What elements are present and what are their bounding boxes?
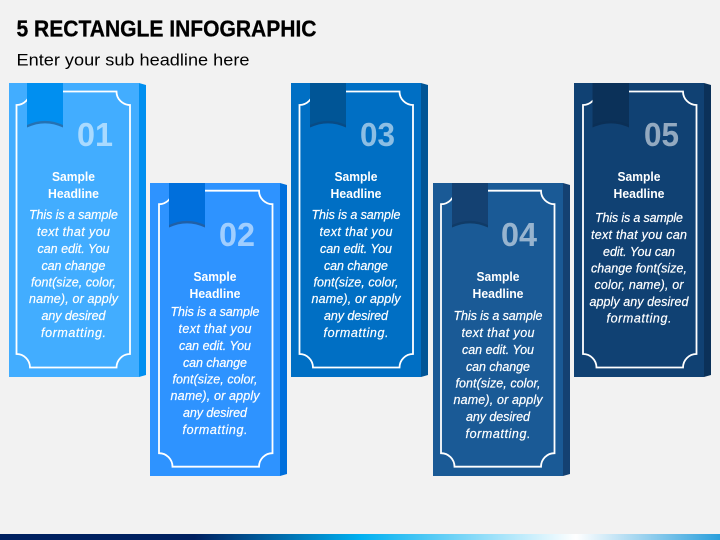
headline 03 <box>330 170 382 201</box>
body text 04: font(size, color, <box>456 376 540 390</box>
body text 01: any desired <box>42 309 107 323</box>
icon: ribbon 02 <box>169 183 205 225</box>
sub headline: Enter your sub headline here <box>16 50 250 70</box>
panel: card 03 <box>291 83 428 377</box>
body text 04: can edit. You <box>462 343 534 357</box>
headline 03: Headline <box>330 187 382 201</box>
headline 01: Headline <box>48 187 99 201</box>
body text 02: name), or apply <box>170 389 260 403</box>
body text 02: font(size, color, <box>172 372 258 386</box>
footer gradient bar <box>0 534 720 540</box>
headline 01 <box>48 170 99 201</box>
headline 02: Headline <box>190 287 241 301</box>
icon: ribbon 03 <box>310 83 346 125</box>
icon: ribbon 04 <box>452 183 488 225</box>
body text 03: can edit. You <box>320 242 392 256</box>
body text 01: formatting. <box>41 326 106 340</box>
body text 04: formatting. <box>466 427 530 441</box>
number 05: 05 <box>644 116 679 153</box>
headline 04: Sample <box>476 270 520 284</box>
headline 04: Headline <box>472 287 524 301</box>
body text 02: can edit. You <box>179 339 251 353</box>
headline 05: Sample <box>618 170 661 184</box>
icon: ribbon 01 <box>27 83 63 125</box>
body text 02: can change <box>183 356 247 370</box>
body text 03: can change <box>324 259 388 273</box>
body text 02: text that you <box>178 322 252 336</box>
body text 04: text that you <box>462 326 535 340</box>
number 03: 03 <box>360 116 395 153</box>
body text 04 <box>454 309 543 441</box>
body text 05: change font(size, <box>591 262 687 276</box>
body text 03: formatting. <box>324 326 388 340</box>
number 01: 01 <box>77 116 113 153</box>
number 02: 02 <box>219 216 255 253</box>
body text 03: name), or apply <box>312 292 401 306</box>
body text 01 <box>29 208 119 340</box>
body text 05 <box>590 211 690 326</box>
headline 05: Headline <box>614 187 665 201</box>
body text 02: any desired <box>183 406 248 420</box>
body text 01: name), or apply <box>29 292 119 306</box>
body text 05: formatting. <box>606 312 672 326</box>
body text 03: text that you <box>320 225 393 239</box>
body text 05: This is a sample <box>595 211 683 225</box>
body text 02: This is a sample <box>170 305 260 319</box>
title: 5 RECTANGLE INFOGRAPHIC <box>16 16 316 42</box>
body text 04: This is a sample <box>454 309 543 323</box>
body text 04: name), or apply <box>454 393 543 407</box>
panel: card 02 <box>150 183 287 476</box>
body text 05: apply any desired <box>590 295 690 309</box>
panel: card 05 <box>574 83 711 377</box>
body text 01: text that you <box>37 225 110 239</box>
body text 03: any desired <box>324 309 389 323</box>
body text 02: formatting. <box>182 423 248 437</box>
body text 01: This is a sample <box>29 208 118 222</box>
headline 04 <box>472 270 524 301</box>
panel: card 04 <box>433 183 570 476</box>
body text 03: font(size, color, <box>314 276 398 290</box>
headline 03: Sample <box>334 170 378 184</box>
body text 04: can change <box>466 360 530 374</box>
headline 05 <box>614 170 665 201</box>
body text 01: can edit. You <box>38 242 110 256</box>
body text 01: font(size, color, <box>31 276 116 290</box>
headline 02 <box>190 270 241 301</box>
body text 01: can change <box>42 259 106 273</box>
headline 02: Sample <box>194 270 237 284</box>
body text 02 <box>170 305 260 437</box>
body text 05: edit. You can <box>603 245 675 259</box>
panel: card 01 <box>9 83 146 377</box>
body text 03 <box>312 208 401 340</box>
body text 03: This is a sample <box>312 208 401 222</box>
headline 01: Sample <box>52 170 95 184</box>
body text 04: any desired <box>466 410 531 424</box>
icon: ribbon 05 <box>592 83 629 125</box>
body text 05: color, name), or <box>594 278 684 292</box>
body text 05: text that you can <box>591 228 687 242</box>
number 04: 04 <box>501 216 538 253</box>
